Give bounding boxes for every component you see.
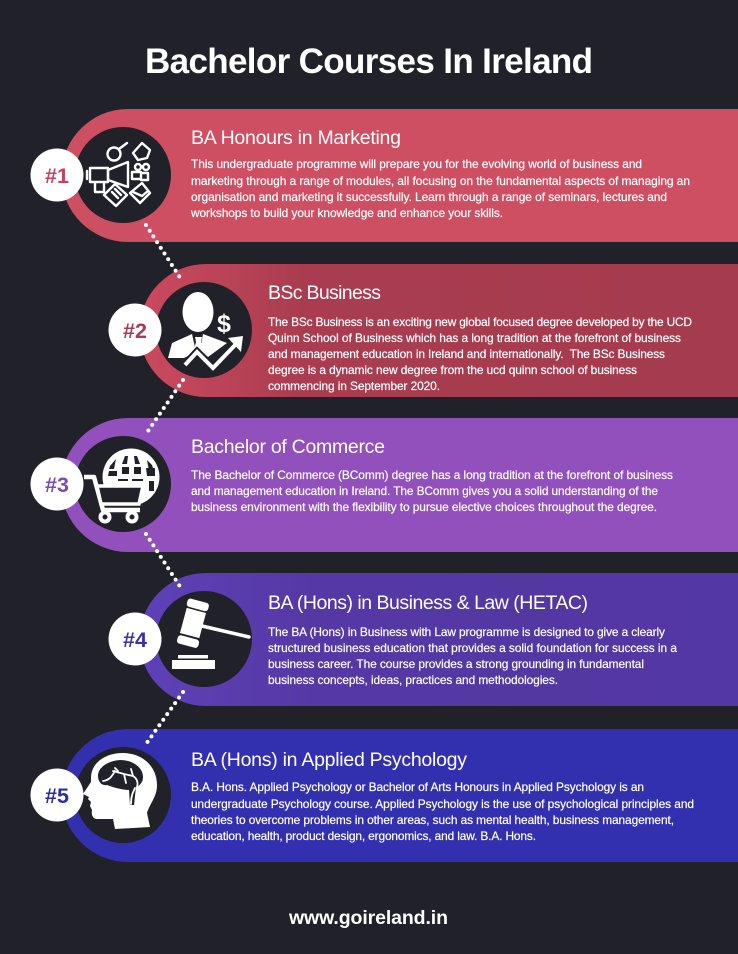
- badge: #1: #1: [45, 164, 69, 188]
- panel: BA Honours in Marketing: [30, 109, 738, 242]
- badge: #3: [30, 458, 84, 510]
- badge: #1: [30, 148, 84, 202]
- badge: #3: #3: [45, 473, 69, 497]
- connector: 2 to 3: [146, 380, 183, 434]
- text block: course 1 description: marketing through a range of modules, all focusing on the fundamental aspects of managing an: [191, 174, 690, 188]
- footer: website: www.goireland.in: [288, 907, 448, 929]
- badge: #2: #2: [123, 319, 147, 343]
- badge: #4: [108, 612, 162, 666]
- text block: course 3 description: and management education in Ireland. The BComm gives you a solid understanding of the: [191, 484, 658, 498]
- text block: course 1 description: [190, 157, 690, 220]
- icon: businessman with rising arrow: $: [217, 310, 231, 338]
- text block: course 1 description: organisation and marketing it successfully. Learn through a range of seminars, lectures and: [191, 190, 667, 204]
- text block: course 2 description: and management education in Ireland and internationally. The BSc Business: [268, 347, 665, 361]
- heading: course 5: BA (Hons) in Applied Psychology: [191, 749, 467, 771]
- connector: 1 to 2: [146, 225, 181, 279]
- icon: businessman with rising arrow: [156, 282, 252, 378]
- icon: gavel: [156, 591, 252, 687]
- badge: #5: #5: [45, 784, 69, 808]
- icon: head with brain: [75, 747, 171, 843]
- panel: BA (Hons) in Business & Law: [108, 573, 738, 706]
- badge: #4: #4: [123, 628, 147, 652]
- text block: course 4 description: The BA (Hons) in Business with Law programme is designed to give a clearly: [268, 625, 665, 639]
- text block: course 2 description: commencing in September 2020.: [268, 379, 440, 393]
- heading: course 1: BA Honours in Marketing: [191, 127, 401, 149]
- badge: #2: [108, 304, 162, 356]
- panel: Bachelor of Commerce: [30, 418, 738, 552]
- text block: course 1 description: workshops to build your knowledge and enhance your skills.: [190, 206, 503, 220]
- text block: course 5 description: theories to overcome problems in other areas, such as mental health, business management,: [191, 813, 674, 827]
- text block: course 2 description: The BSc Business is an exciting new global focused degree developed by the UCD: [268, 315, 692, 329]
- text block: course 5 description: B.A. Hons. Applied Psychology or Bachelor of Arts Honours in Applied Psychology is an: [191, 780, 644, 794]
- text block: course 5 description: education, health, product design, ergonomics, and law. B.A. Hons.: [191, 829, 536, 843]
- icon: marketing megaphone: [75, 127, 171, 223]
- text block: course 3 description: The Bachelor of Commerce (BComm) degree has a long tradition at the forefront of business: [191, 468, 673, 482]
- text block: course 4 description: business concepts, ideas, practices and methodologies.: [268, 673, 558, 687]
- icon: shopping cart with globe: [75, 436, 171, 532]
- connector: 3 to 4: [146, 534, 181, 588]
- panel: BA (Hons) in Applied Psychology: [30, 729, 738, 862]
- text block: course 3 description: business environment with the flexibility to pursue elective choices throughout the degree.: [191, 500, 657, 514]
- title: Bachelor Courses In Ireland: [145, 42, 593, 81]
- text block: course 5 description: [191, 780, 694, 843]
- badge: #5: [30, 768, 84, 822]
- text block: course 2 description: Quinn School of Business which has a long tradition at the forefront of business: [268, 331, 681, 345]
- text block: course 5 description: undergraduate Psychology course. Applied Psychology is the use of psychological principles and: [191, 797, 694, 811]
- text block: course 4 description: [268, 625, 677, 687]
- text block: course 2 description: degree is a dynamic new degree from the ucd quinn school of business: [268, 363, 637, 377]
- panel: BSc Business: [108, 264, 738, 397]
- text block: course 4 description: structured business education that provides a solid foundation for success in a: [268, 641, 677, 655]
- text block: course 1 description: This undergraduate programme will prepare you for the evolving world of business and: [191, 157, 642, 171]
- connector: 4 to 5: [146, 692, 183, 744]
- heading: course 3: Bachelor of Commerce: [191, 436, 385, 458]
- text block: course 3 description: [191, 468, 673, 514]
- heading: course 4: BA (Hons) in Business & Law (HETAC): [268, 592, 588, 614]
- heading: course 2: BSc Business: [268, 282, 381, 304]
- text block: course 4 description: business career. The course provides a strong grounding in fundamental: [268, 657, 644, 671]
- text block: course 2 description: [268, 315, 692, 393]
